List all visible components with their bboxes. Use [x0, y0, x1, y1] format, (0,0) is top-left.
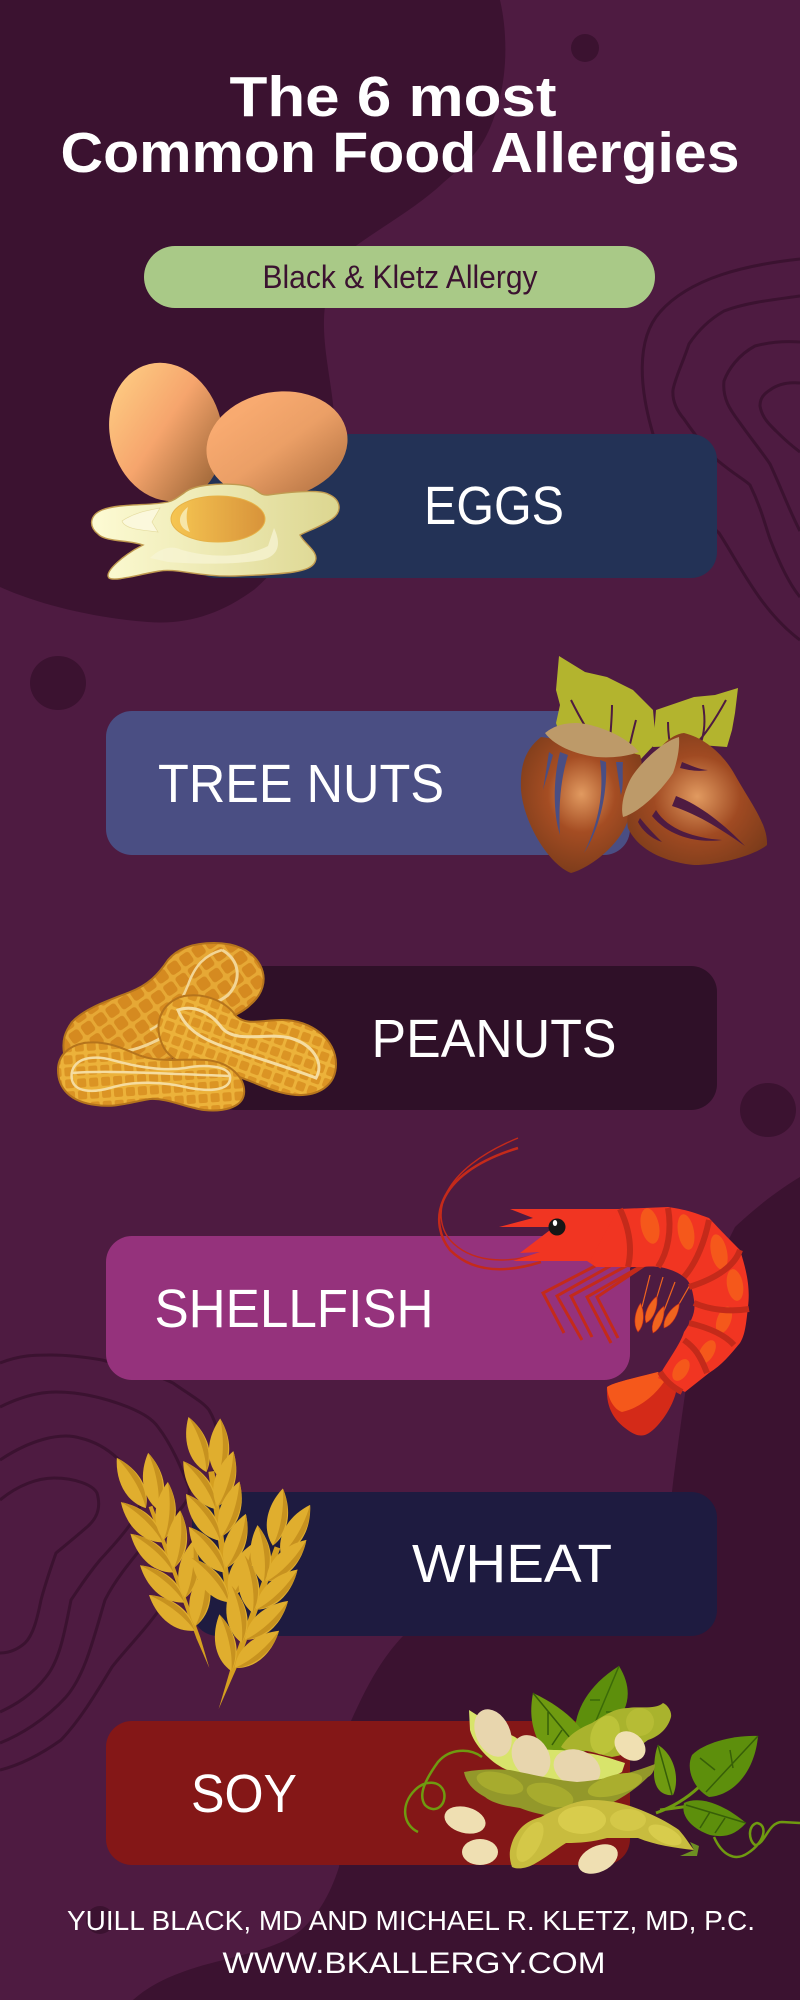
- subtitle pill: [144, 246, 655, 308]
- title: Common Food Allergies: [60, 121, 740, 185]
- panel: peanuts: PEANUTS: [372, 1009, 616, 1069]
- background blob: top left: [0, 0, 505, 623]
- icon: wheat stalks: [92, 1408, 334, 1722]
- contour lines: bottom left: [0, 1355, 218, 1770]
- panel: soy: [106, 1721, 630, 1865]
- open pod: [467, 1703, 625, 1793]
- antennae: [439, 1138, 541, 1269]
- loose beans: [441, 1802, 623, 1880]
- icon: peanuts: [58, 943, 336, 1110]
- panel: soy: SOY: [191, 1764, 297, 1824]
- footer text: WWW.BKALLERGY.COM: [222, 1947, 606, 1980]
- icon: shrimp: [439, 1138, 749, 1435]
- panel: eggs: [190, 434, 717, 578]
- swimmerets: [634, 1275, 690, 1335]
- footer text: [67, 1905, 755, 1980]
- icon: eggs: [92, 351, 356, 579]
- panel: eggs: EGGS: [424, 476, 564, 536]
- panel: tree nuts: [106, 711, 630, 855]
- leaves: [531, 1666, 758, 1836]
- subtitle pill: Black & Kletz Allergy: [262, 259, 538, 295]
- top right pod: [561, 1703, 671, 1767]
- front pod: [510, 1800, 699, 1868]
- title: [60, 65, 740, 185]
- panel: shellfish: [106, 1236, 630, 1380]
- panel: wheat: WHEAT: [412, 1534, 612, 1594]
- icon: hazelnuts: [521, 656, 767, 873]
- tendrils: [405, 1751, 800, 1857]
- tail: [607, 1372, 676, 1435]
- panel: peanuts: [210, 966, 717, 1110]
- title: The 6 most: [230, 65, 557, 129]
- eye: [548, 1218, 566, 1236]
- head: [499, 1209, 635, 1267]
- background blob: bottom right: [133, 1177, 800, 2000]
- olive pod: [464, 1764, 655, 1817]
- panel: tree nuts: TREE NUTS: [158, 754, 444, 814]
- panel: shellfish: SHELLFISH: [154, 1279, 434, 1339]
- contour lines: top right: [642, 259, 800, 640]
- body: [590, 1207, 749, 1392]
- icon: soybeans: [405, 1666, 800, 1880]
- footer text: YUILL BLACK, MD AND MICHAEL R. KLETZ, MD, P.C.: [67, 1905, 755, 1936]
- panel: wheat: [192, 1492, 717, 1636]
- legs: [543, 1265, 645, 1343]
